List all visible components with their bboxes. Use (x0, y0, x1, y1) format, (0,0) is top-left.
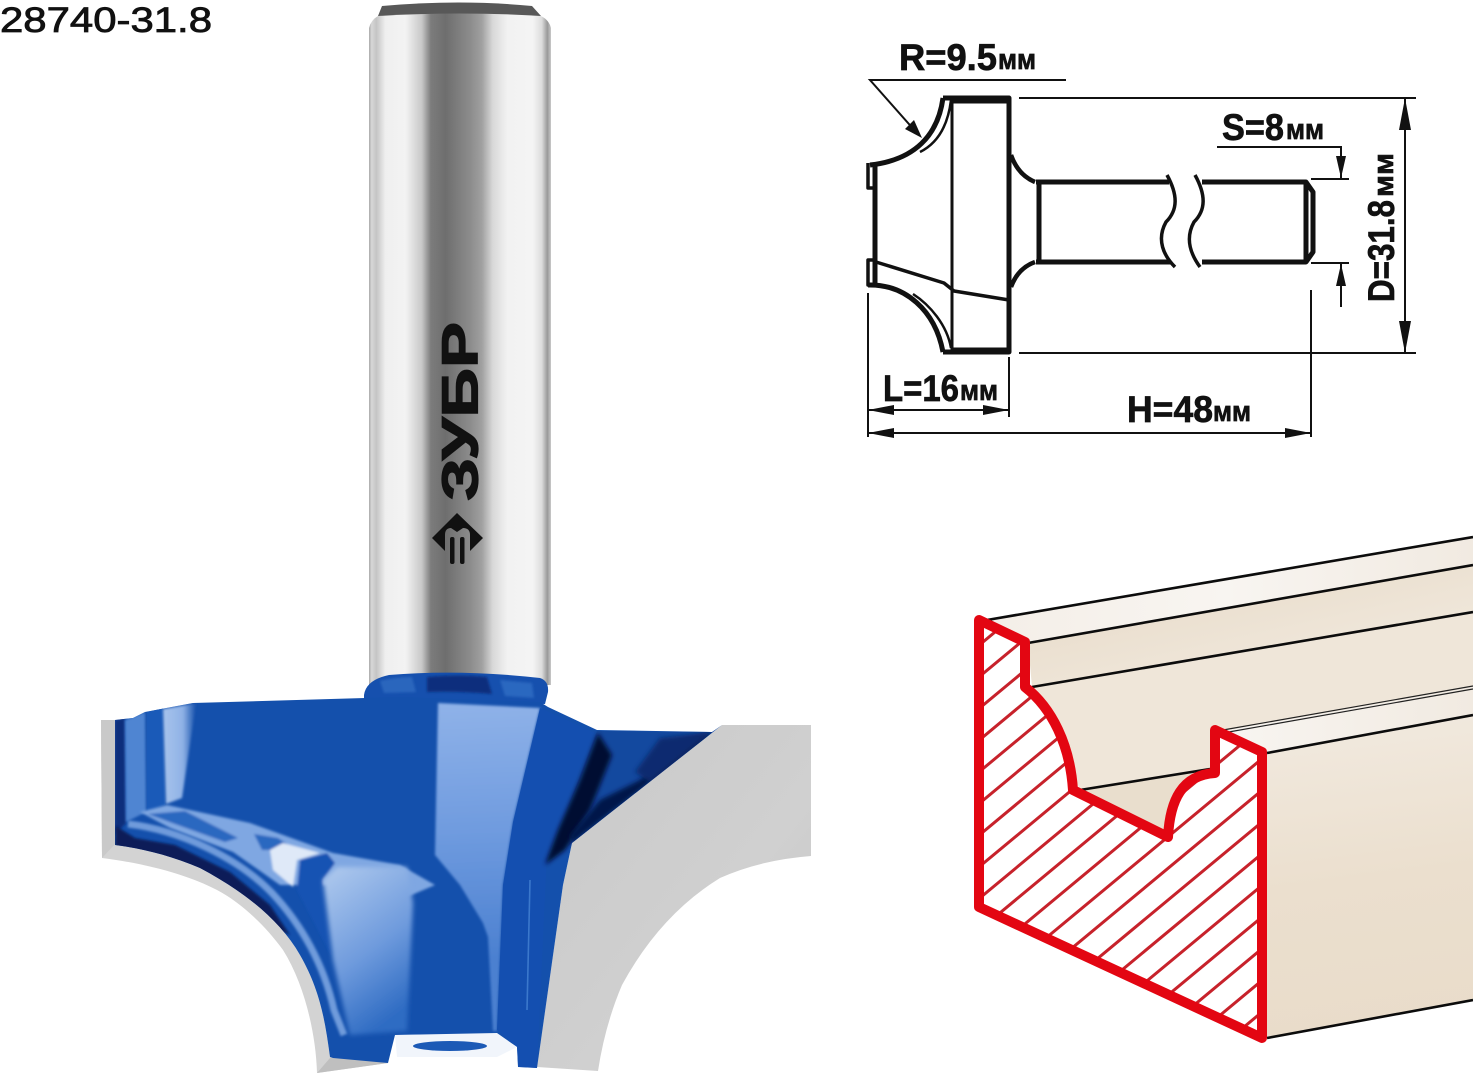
dark lower-left band (115, 824, 344, 1035)
shank (369, 2, 551, 685)
label: length L (868, 293, 1009, 437)
label: diameter D (1019, 98, 1416, 353)
left carbide blade (101, 720, 388, 1073)
central highlight face (435, 703, 540, 1031)
cross-section with hatching (974, 615, 1267, 1043)
collar (364, 673, 548, 704)
label: radius R: мм (998, 44, 1036, 76)
right face (497, 708, 542, 1068)
highlight band along curve (140, 804, 436, 896)
moulding body (985, 537, 1473, 1038)
label: diameter D: мм (1368, 153, 1400, 197)
lower light face (323, 867, 413, 1035)
label: length L: L=16 (883, 368, 959, 409)
label: height H (868, 290, 1311, 438)
cutter outline (868, 98, 1035, 352)
label: diameter D: D=31.8 (1361, 200, 1402, 302)
article number heading: 28740-31.8 (0, 1, 212, 40)
wood moulding profile (974, 536, 1473, 1043)
dark ridge and pitting by right blade (545, 731, 715, 865)
bottom bearing hole (395, 1033, 517, 1057)
label: height H: мм (1213, 396, 1251, 428)
brand name: ЗУБР (432, 322, 488, 501)
shank outline with break (1036, 175, 1313, 267)
label: height H: H=48 (1127, 389, 1213, 430)
blue cutter body (115, 697, 722, 1068)
technical dimension drawing (868, 37, 1416, 438)
label: radius R: R=9.5 (899, 37, 997, 78)
label: shank S: мм (1286, 114, 1324, 146)
label: shank S (1217, 107, 1349, 307)
router bit photo (101, 2, 811, 1073)
label: shank S: S=8 (1222, 107, 1284, 148)
brand logo on shank (432, 322, 488, 564)
logo diamond mark (432, 513, 483, 564)
right carbide blade (537, 725, 811, 1071)
label: length L: мм (960, 375, 998, 407)
label: radius R (870, 37, 1066, 138)
left edge strips (115, 703, 196, 835)
